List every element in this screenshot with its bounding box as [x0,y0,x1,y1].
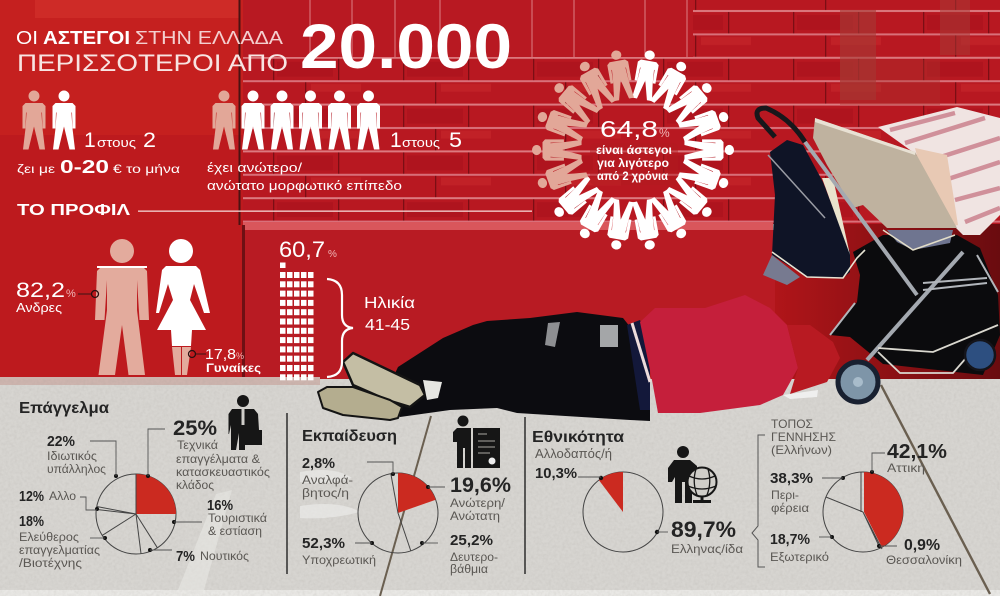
icon: two people [22,90,76,150]
men share: 82,2 [16,279,65,302]
callout: 25,2% secondary: βάθμια [450,564,488,576]
callout: 19,6% higher: 19,6% [450,474,511,497]
callout: 38,3% regions [770,470,843,515]
man: shoes [343,353,425,407]
callout: 12% other [19,488,97,510]
stat: 1 in 5 has higher education: έχει ανώτερο/ [207,161,303,175]
gender chart [16,239,261,375]
stroller: beige tray [813,118,957,228]
callout: 10,3% foreign [535,447,612,482]
callout: 89,7% greek [657,517,743,556]
icon: businessman [228,395,262,450]
men share: Ανδρες [16,300,62,315]
radial chart text [596,116,672,183]
stroller: wheels [965,340,995,370]
callout: 38,3% regions: 38,3% [770,470,813,487]
stat: 1 in 5 has higher education: 5 [449,129,462,152]
callout: 25% technical: κατασκευαστικός [176,467,270,479]
dark label backing [590,143,678,185]
callout: 18% freelancer [19,513,105,570]
stat: 1 in 5 has higher education [207,90,462,193]
callout: 0,9% thessaloniki: Θεσσαλονίκη [886,553,962,567]
panel: education [302,416,511,576]
stroller: bag [770,140,850,278]
callout: 10,3% foreign: 10,3% [535,465,577,482]
callout: 2,8% illiterate [302,455,393,500]
callout: 2,8% illiterate: βητος/η [302,488,349,500]
callout: 25% technical: κλάδος [176,480,214,492]
pie chart: profession [95,474,176,554]
stroller: seat and basket [830,235,1000,375]
callout: 16% tourism: 16% [207,497,233,514]
callout: 7% shipping: Νουτικός [200,551,249,563]
panel: profession [19,395,270,570]
women share [188,346,261,375]
pie chart: nationality [583,472,663,552]
age label: Ηλικία [364,295,415,312]
left plain red wall [0,0,243,380]
icon: man [95,239,149,375]
callout: 52,3% compulsory: Υποχρεωτική [302,555,376,567]
callout: 0,9% thessaloniki [879,537,962,567]
radial chart text: 64,8 [600,116,658,142]
heading: birthplace: ΤΟΠΟΣ [771,417,813,431]
callout: 18% freelancer: /Βιοτέχνης [19,558,83,570]
stat: 1 in 5 has higher education: στους [402,135,440,150]
callout: 7% shipping: 7% [176,548,195,565]
stat: 1 in 2 lives on 0-20 euro [17,90,180,177]
section heading: profile: ΤΟ ΠΡΟΦΙΛ [17,202,130,219]
callout: 25% technical [148,417,270,492]
radial chart text: από 2 χρόνια [597,171,668,183]
callout: 18% freelancer: επαγγελματίας [19,545,100,557]
callout: 89,7% greek: 89,7% [671,517,736,542]
stroller: blanket [878,107,1000,235]
lower red wall [243,230,1000,380]
callout: 42,1% attica [872,441,947,475]
callout: 18,7% abroad: 18,7% [770,531,810,548]
radial chart text: % [659,126,670,140]
heading: education: Εκπαίδευση [302,428,397,445]
title [16,12,512,82]
women share: % [236,351,244,361]
stat: 1 in 2 lives on 0-20 euro: ζει με [17,162,56,176]
pavement [0,379,1000,596]
stat: 1 in 5 has higher education: 1 [390,129,402,152]
radial person chart: 64.8% [532,49,734,251]
ring of people [549,49,734,251]
women share: Γυναίκες [206,361,261,375]
callout: 16% tourism: Τουριστικά [208,513,267,525]
callout: 7% shipping [150,548,249,565]
panel: birthplace [752,417,962,567]
callout: 22% employee: Ιδιωτικός [47,451,97,463]
age label: 41-45 [365,317,410,334]
callout: 42,1% attica: 42,1% [887,441,947,463]
women share: 17,8 [205,346,236,363]
callout: 25,2% secondary [422,532,498,576]
callout: 25% technical: Τεχνικά [177,440,218,452]
stat: 1 in 2 lives on 0-20 euro: € το μήνα [113,162,180,176]
men share: % [66,288,76,300]
callout: 16% tourism [174,497,267,538]
heading: birthplace [771,417,836,457]
title: ΣΤΗΝ ΕΛΛΑΔΑ [135,28,283,48]
radial chart text: για λιγότερο [597,158,669,170]
pie chart: birthplace [823,470,903,552]
callout: 52,3% compulsory [302,535,376,567]
heading: profession: Επάγγελμα [19,400,109,417]
stat: 1 in 2 lives on 0-20 euro: 2 [143,129,156,152]
callout: 89,7% greek: Ελληνας/ίδα [671,542,743,556]
stroller: handle and frame [757,108,805,142]
heading: birthplace: ΓΕΝΝΗΣΗΣ [771,430,836,444]
man: hoodie [640,295,798,413]
callout: 38,3% regions: φέρεια [771,501,809,515]
callout: 10,3% foreign: Αλλοδαπός/ή [535,447,612,461]
callout: 19,6% higher [428,474,511,523]
callout: 18% freelancer: 18% [19,513,44,530]
brick wall [243,0,1000,224]
callout: 52,3% compulsory: 52,3% [302,535,345,552]
bracket [752,435,765,567]
age label [364,295,415,334]
callout: 42,1% attica: Αττική [887,463,925,475]
title line two: ΠΕΡΙΣΣΟΤΕΡΟΙ ΑΠΟ [17,50,288,77]
panel: nationality [532,429,743,556]
callout: 18% freelancer: Ελεύθερος [19,532,79,544]
stat: 1 in 2 lives on 0-20 euro: 0-20 [60,157,109,177]
callout: 18,7% abroad [770,531,832,564]
callout: 19,6% higher: Ανώτατη [450,511,500,523]
title: ΑΣΤΕΓΟΙ [43,28,130,48]
callout: 25,2% secondary: 25,2% [450,532,493,549]
callout: 19,6% higher: Ανώτερη/ [450,498,506,510]
brace [327,279,353,377]
icon: woman [156,239,210,375]
callout: 22% employee: υπάλληλος [47,464,106,476]
pie chart: education [358,472,438,553]
radial chart text: είναι άστεγοι [596,145,672,157]
icon: person with diploma [453,416,500,468]
callout: 22% employee [47,433,116,476]
icon: person with globe [668,446,716,503]
age share: 60,7 [279,237,325,262]
headline number: 20.000 [300,12,512,82]
callout: 22% employee: 22% [47,433,75,450]
callout: 2,8% illiterate: 2,8% [302,455,335,472]
square unit grid [280,262,314,380]
man: legs [385,312,650,421]
stat: 1 in 5 has higher education: ανώτατο μορφωτικό επίπεδο [207,179,402,193]
title line one: ΟΙ [16,28,38,48]
men share [16,279,98,315]
heading: nationality: Εθνικότητα [532,429,624,446]
stroller [757,107,1000,402]
heading: birthplace: (Ελλήνων) [771,443,832,457]
age share: % [328,249,337,260]
callout: 18,7% abroad: Εξωτερικό [770,550,829,564]
callout: 38,3% regions: Περι- [771,488,799,502]
callout: 25% technical: 25% [173,417,217,440]
age chart [279,237,415,380]
icon: six people [212,90,380,150]
stat: 1 in 2 lives on 0-20 euro: 1 [84,129,96,152]
callout: 12% other: Αλλο [49,491,76,503]
stat: 1 in 2 lives on 0-20 euro: στους [97,135,136,150]
callout: 2,8% illiterate: Αναλφά- [302,475,353,487]
callout: 16% tourism: & εστίαση [208,526,262,538]
callout: 0,9% thessaloniki: 0,9% [904,537,940,554]
callout: 12% other: 12% [19,488,44,505]
callout: 25% technical: επαγγέλματα & [176,454,260,466]
callout: 25,2% secondary: Δευτερο- [450,552,498,564]
